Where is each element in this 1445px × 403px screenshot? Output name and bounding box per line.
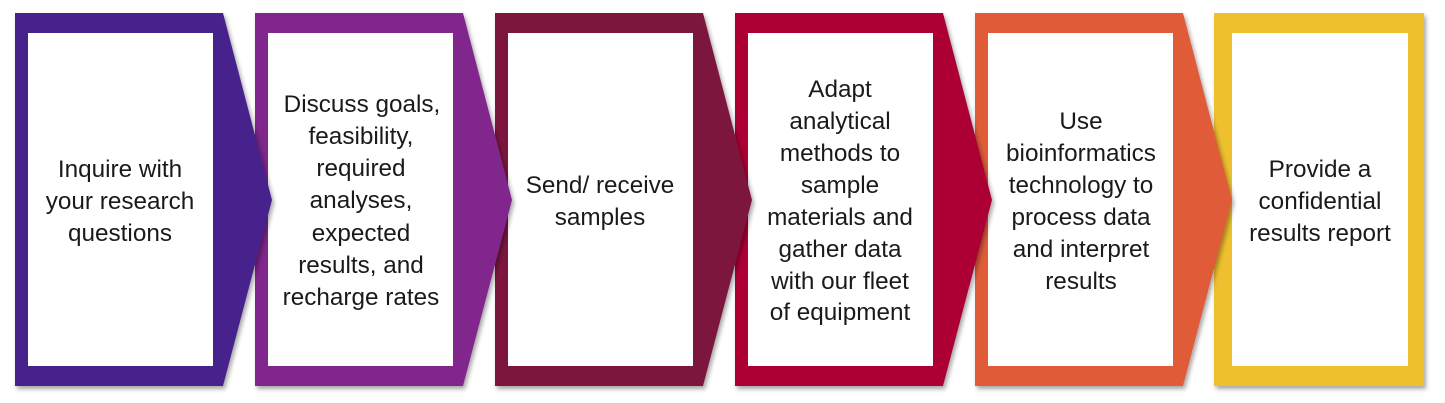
step 5: bioinformatics <box>975 13 1232 386</box>
step 2: discuss goals: expected <box>312 220 410 247</box>
step 4: adapt methods <box>735 13 992 386</box>
step 4: adapt methods: methods to <box>780 140 900 167</box>
step 4: adapt methods: analytical <box>789 108 891 135</box>
step 4: adapt methods: gather data <box>779 236 902 263</box>
step 3: send and receive samples <box>495 13 752 386</box>
step 2: discuss goals: feasibility, <box>309 123 413 150</box>
step 5: bioinformatics: and interpret <box>1013 236 1149 263</box>
step 1: inquire: your research <box>46 188 194 215</box>
step 5: bioinformatics: Use <box>1059 108 1103 135</box>
step 4: adapt methods: Adapt <box>808 76 872 103</box>
step 3: send and receive samples: Send/ receive <box>526 172 674 199</box>
step 2: discuss goals: Discuss goals, <box>284 91 440 118</box>
step 2: discuss goals: results, and <box>298 252 424 279</box>
step 2: discuss goals: recharge rates <box>283 284 439 311</box>
step 4: adapt methods: sample <box>801 172 879 199</box>
step 6: provide report: confidential <box>1259 188 1381 215</box>
step 1: inquire: Inquire with <box>58 156 182 183</box>
step 5: bioinformatics: bioinformatics <box>1006 140 1156 167</box>
step 4: adapt methods: with our fleet <box>770 268 909 295</box>
step 4: adapt methods: materials and <box>767 204 913 231</box>
step 4: adapt methods: of equipment <box>770 299 910 326</box>
step 6: provide report: Provide a <box>1269 156 1372 183</box>
step 1: inquire <box>15 13 272 386</box>
step 2: discuss goals: required <box>316 155 406 182</box>
step 2: discuss goals <box>255 13 512 386</box>
step 1: inquire: questions <box>68 220 172 247</box>
step 3: send and receive samples: samples <box>555 204 645 231</box>
step 2: discuss goals: analyses, <box>310 187 412 214</box>
step 5: bioinformatics: results <box>1045 268 1117 295</box>
step 5: bioinformatics: technology to <box>1009 172 1153 199</box>
step 6: provide report <box>1214 13 1424 386</box>
step 6: provide report: results report <box>1249 220 1391 247</box>
step 5: bioinformatics: process data <box>1011 204 1151 231</box>
